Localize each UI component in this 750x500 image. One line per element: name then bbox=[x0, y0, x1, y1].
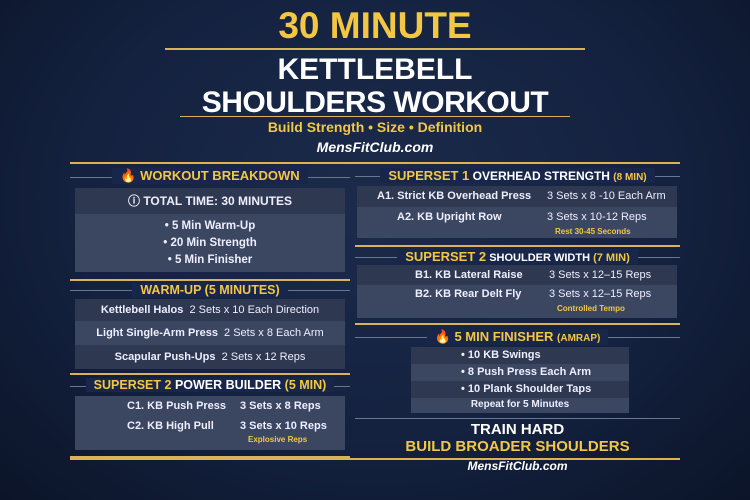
panel: superset 2 shoulder width bbox=[355, 249, 680, 318]
title bbox=[202, 5, 548, 119]
panel: workout breakdown: • 5 Min Warm-Up bbox=[165, 220, 255, 232]
panel: superset 2 shoulder width: B1. KB Lateral Raise bbox=[415, 269, 523, 281]
title: SHOULDERS WORKOUT bbox=[202, 86, 548, 119]
panel: workout breakdown: ⓘ TOTAL TIME: 30 MINUTES bbox=[128, 194, 292, 208]
panel: superset 1 overhead strength: 3 Sets x 10-12 Reps bbox=[547, 211, 647, 223]
panel: superset 2 power builder bbox=[70, 378, 350, 450]
heading: power builder: SUPERSET 2 POWER BUILDER (5 MIN) bbox=[94, 378, 326, 392]
panel: superset 2 shoulder width: Controlled Tempo bbox=[557, 304, 625, 313]
heading: superset 2 shoulder width: SUPERSET 2 SHOULDER WIDTH (7 MIN) bbox=[405, 249, 630, 264]
panel: superset 2 power builder: Explosive Reps bbox=[248, 435, 307, 444]
panel: workout breakdown: • 5 Min Finisher bbox=[168, 254, 252, 266]
panel: superset 2 shoulder width: B2. KB Rear Delt Fly bbox=[415, 288, 521, 300]
panel: finisher: • 10 Plank Shoulder Taps bbox=[461, 383, 591, 395]
callout: train hard: BUILD BROADER SHOULDERS bbox=[405, 438, 630, 455]
heading: warm-up: WARM-UP (5 MINUTES) bbox=[140, 283, 280, 297]
panel: superset 2 shoulder width: 3 Sets x 12–15 Reps bbox=[549, 288, 651, 300]
panel: superset 2 power builder: 3 Sets x 10 Reps bbox=[240, 420, 327, 432]
panel: superset 1 overhead strength: A2. KB Upright Row bbox=[397, 211, 502, 223]
panel: warm-up: Scapular Push-Ups 2 Sets x 12 Reps bbox=[115, 351, 305, 363]
heading: finisher: 🔥 5 MIN FINISHER (AMRAP) bbox=[435, 329, 600, 344]
panel: superset 2 shoulder width: 3 Sets x 12–15 Reps bbox=[549, 269, 651, 281]
panel: finisher: • 8 Push Press Each Arm bbox=[461, 366, 591, 378]
panel: warm-up bbox=[70, 283, 350, 369]
panel: workout breakdown: • 20 Min Strength bbox=[163, 237, 257, 249]
website top: MensFitClub.com bbox=[317, 139, 433, 155]
panel: superset 1 overhead strength: Rest 30-45 Seconds bbox=[555, 227, 631, 236]
panel: warm-up: Light Single-Arm Press 2 Sets x 8 Each Arm bbox=[96, 327, 324, 339]
panel: superset 2 power builder: C1. KB Push Press bbox=[127, 400, 226, 412]
panel: superset 1 overhead strength: 3 Sets x 8 -10 Each Arm bbox=[547, 190, 666, 202]
title: KETTLEBELL bbox=[278, 53, 472, 86]
panel: warm-up: Kettlebell Halos 2 Sets x 10 Each Direction bbox=[101, 304, 319, 316]
panel: superset 2 power builder: C2. KB High Pull bbox=[127, 420, 214, 432]
panel: finisher: • 10 KB Swings bbox=[461, 349, 541, 361]
panel: finisher bbox=[355, 329, 680, 413]
panel: superset 1 overhead strength bbox=[355, 168, 680, 238]
panel: superset 1 overhead strength: A1. Strict KB Overhead Press bbox=[377, 190, 531, 202]
subtitle: Build Strength • Size • Definition bbox=[268, 119, 482, 135]
heading: workout breakdown: 🔥 WORKOUT BREAKDOWN bbox=[120, 168, 300, 183]
panel: finisher: Repeat for 5 Minutes bbox=[471, 399, 569, 410]
website bottom: MensFitClub.com bbox=[467, 459, 568, 473]
panel: superset 2 power builder: 3 Sets x 8 Reps bbox=[240, 400, 321, 412]
title: 30 MINUTE bbox=[278, 5, 472, 46]
panel: workout breakdown bbox=[70, 168, 350, 272]
heading: superset 1: SUPERSET 1 OVERHEAD STRENGTH (8 MIN) bbox=[388, 168, 647, 183]
callout: train hard: TRAIN HARD bbox=[471, 421, 564, 438]
callout: train hard bbox=[405, 421, 630, 455]
